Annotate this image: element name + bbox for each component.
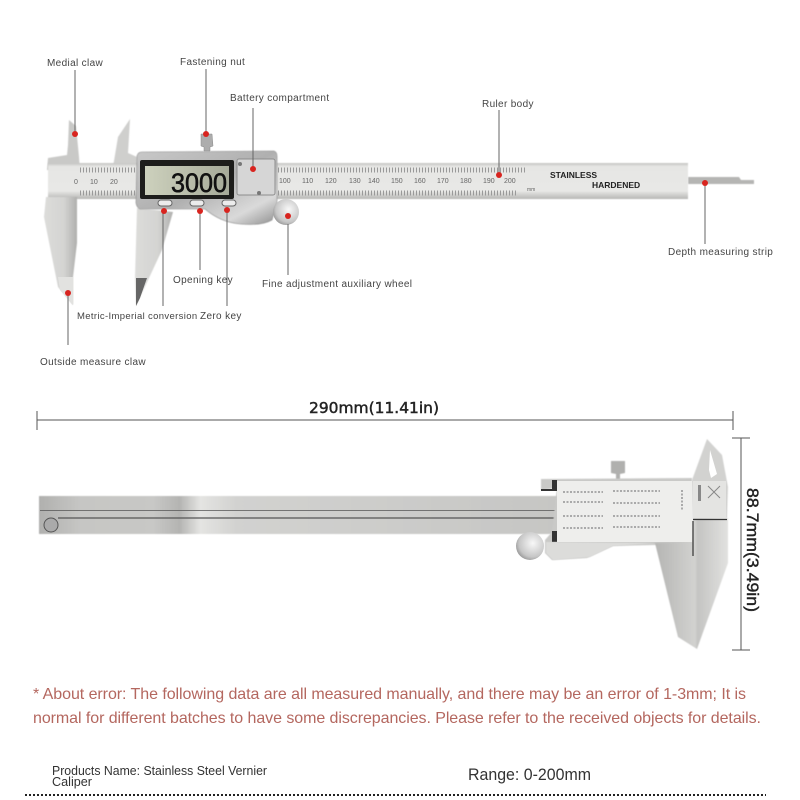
medial claw and fixed jaw upper xyxy=(47,120,80,170)
ruler scale: 0 xyxy=(74,179,78,186)
error note: * About error: The following data are all measured manually, and there may be an error of 1-3mm; It is xyxy=(33,686,746,703)
ruler scale: 130 xyxy=(349,178,361,185)
moving lower jaw xyxy=(135,208,173,306)
label: depth measuring strip: Depth measuring strip xyxy=(668,247,773,258)
ruler scale: mm xyxy=(527,187,535,193)
error note: normal for different batches to have some discrepancies. Please refer to the received objects for details. xyxy=(33,710,761,727)
LCD display xyxy=(140,160,234,199)
stainless hardened marking xyxy=(550,170,640,190)
width dimension xyxy=(37,399,733,430)
jaw edge line xyxy=(693,520,727,556)
label: ruler body: Ruler body xyxy=(482,99,534,110)
width value: 290mm(11.41in) xyxy=(309,399,439,417)
upper jaw xyxy=(692,439,728,520)
product name xyxy=(52,763,268,789)
ruler scale: 10 xyxy=(90,179,98,186)
spec label plate xyxy=(557,481,692,542)
stainless hardened marking: STAINLESS xyxy=(550,170,597,180)
dotted footer line xyxy=(25,794,766,796)
fixed outside claw xyxy=(44,197,77,305)
ruler scale: 120 xyxy=(325,178,337,185)
ruler scale: 160 xyxy=(414,178,426,185)
stainless hardened marking: HARDENED xyxy=(592,180,640,190)
secondary upper jaw xyxy=(113,119,137,168)
label: medial claw: Medial claw xyxy=(47,58,104,69)
nut xyxy=(611,461,625,480)
label: fine adjustment wheel: Fine adjustment auxiliary wheel xyxy=(262,279,412,290)
label: zero key: Zero key xyxy=(200,311,242,322)
slider dark corners xyxy=(541,480,557,542)
claw tip xyxy=(58,277,73,305)
ruler body xyxy=(48,163,688,199)
fastening nut xyxy=(201,134,213,151)
slider back xyxy=(541,478,692,560)
height dimension xyxy=(732,438,761,650)
ruler scale: 20 xyxy=(110,179,118,186)
product name: Caliper xyxy=(52,774,93,789)
top caliper photo xyxy=(44,69,754,345)
battery compartment xyxy=(237,159,275,195)
keys xyxy=(158,200,236,206)
jaw dark tip xyxy=(136,278,147,306)
ruler scale: 170 xyxy=(437,178,449,185)
label: outside measure claw: Outside measure claw xyxy=(40,357,146,368)
label: metric-imperial conversion: Metric-Imperial conversion xyxy=(77,311,198,322)
bar xyxy=(39,496,559,534)
ruler scale xyxy=(74,170,535,193)
ruler scale: 100 xyxy=(279,178,291,185)
lower jaw xyxy=(655,518,728,649)
label: opening key: Opening key xyxy=(173,275,233,286)
leader lines xyxy=(68,69,705,345)
LCD reading: 3000 xyxy=(171,168,227,198)
depth measuring strip xyxy=(688,177,754,184)
end screw xyxy=(44,518,58,532)
label: battery compartment: Battery compartment xyxy=(230,93,329,104)
jaw slot xyxy=(709,450,717,478)
product name: Products Name: Stainless Steel Vernier xyxy=(52,763,268,778)
height value: 88.7mm(3.49in) xyxy=(743,488,761,612)
bottom caliper photo xyxy=(39,439,728,649)
logo block xyxy=(693,481,726,518)
ruler scale: 150 xyxy=(391,178,403,185)
ruler scale: 180 xyxy=(460,178,472,185)
grip xyxy=(546,542,655,560)
ruler scale: 190 xyxy=(483,178,495,185)
fine adjustment wheel xyxy=(273,199,299,225)
wheel xyxy=(516,532,544,560)
range: Range: 0-200mm xyxy=(468,765,591,784)
spec table marks xyxy=(563,490,682,528)
slider body xyxy=(136,151,277,224)
red markers xyxy=(65,131,708,296)
ruler scale: 110 xyxy=(302,178,313,185)
ruler scale: 140 xyxy=(368,178,380,185)
callout labels xyxy=(40,57,773,368)
error note xyxy=(33,686,761,727)
ruler scale: 200 xyxy=(504,178,516,185)
label: fastening nut: Fastening nut xyxy=(180,57,245,68)
